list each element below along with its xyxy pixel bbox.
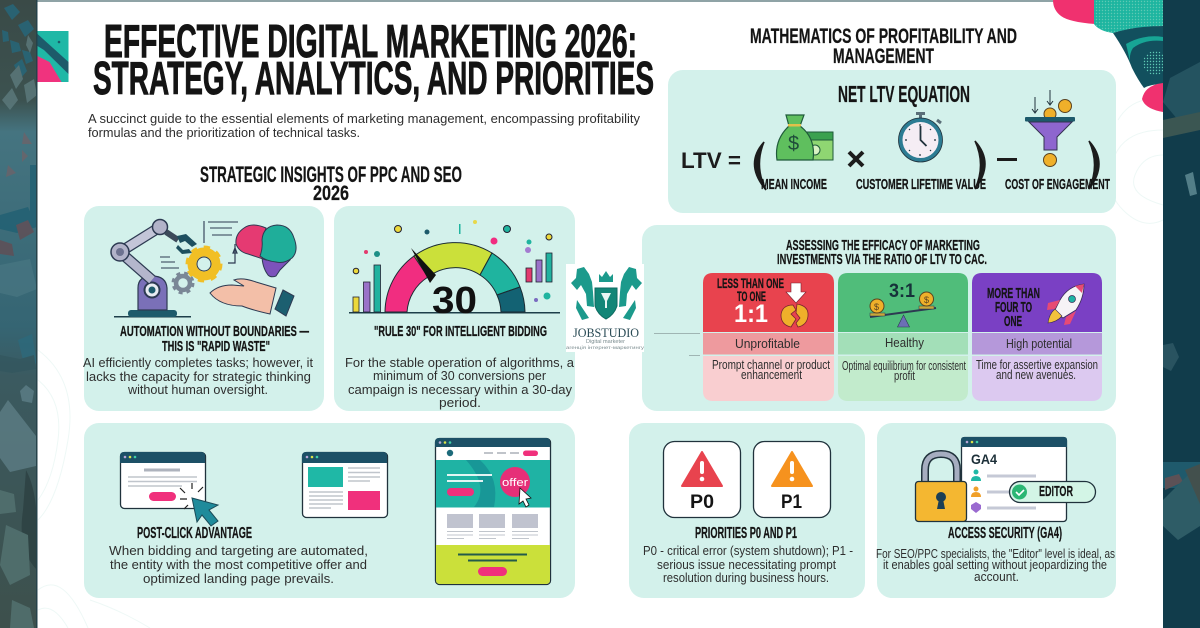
card text: [83, 356, 314, 397]
logo: JobStudio: JOBSTUDIO: [573, 326, 639, 340]
icon: P0 red warning: [664, 442, 740, 518]
card: unprofitable: 1:1: [734, 300, 768, 328]
card text: campaign is necessary within a 30-day: [348, 383, 573, 397]
subtitle: [88, 112, 641, 140]
card heading: THIS IS "RAPID WASTE": [162, 339, 270, 355]
panel: post-click advantage: [84, 423, 575, 598]
icon: stopwatch: [898, 112, 942, 162]
label: mean income: MEAN INCOME: [761, 177, 827, 193]
heading: mathematics of profitability: [750, 24, 1017, 68]
decoration: top right colour blobs: [1053, 0, 1167, 112]
panel: LTV to CAC ratio assessment: [642, 225, 1116, 411]
heading: strategic insights: [200, 162, 462, 205]
panel: net LTV equation: [668, 70, 1116, 213]
heading: mathematics of profitability: MANAGEMENT: [833, 44, 934, 68]
card: healthy: $: [924, 295, 929, 305]
panel heading: INVESTMENTS VIA THE RATIO OF LTV TO CAC.: [777, 251, 987, 268]
chart: gauge with bars and number 30: 30: [432, 280, 477, 322]
card: healthy: $: [874, 302, 879, 312]
card: unprofitable: LESS THAN ONE: [717, 275, 784, 291]
card text: When bidding and targeting are automated,: [109, 544, 368, 558]
card text: it enables goal setting without jeopardizing the: [883, 558, 1107, 572]
card: high potential: MORE THAN: [987, 286, 1040, 302]
icon: robot arm, gears, brain and hand: [111, 220, 296, 318]
icon: P0 red warning: P0: [690, 492, 714, 513]
equation: minus sign: [997, 158, 1017, 161]
card heading: ACCESS SECURITY (GA4): [948, 525, 1062, 542]
icon: GA4 window with lock and editor badge: EDITOR: [1039, 483, 1073, 500]
card: high potential: FOUR TO: [995, 300, 1032, 316]
panel heading: NET LTV EQUATION: [838, 81, 970, 107]
icon: P1 orange warning: [754, 442, 830, 518]
icon: funnel with coins: [1025, 90, 1075, 166]
title: EFFECTIVE DIGITAL MARKETING 2026:: [104, 15, 637, 67]
icon: P1 orange warning: P1: [781, 492, 802, 513]
card: high potential: Time for assertive expansion: [976, 358, 1098, 372]
title: [93, 15, 654, 104]
card: healthy: Optimal equilibrium for consistent: [842, 359, 966, 373]
panel: priorities P0 and P1: [629, 423, 865, 598]
card text: lacks the capacity for strategic thinking: [86, 370, 311, 384]
equation: open bracket: [754, 142, 766, 190]
decoration: left illustrated strip: [0, 0, 38, 628]
card text: without human oversight.: [127, 383, 268, 397]
card: unprofitable: Unprofitable: [735, 337, 800, 351]
equation: multiply sign: [849, 152, 863, 166]
decoration: small colour block: [38, 31, 68, 82]
card heading: [120, 324, 309, 355]
equation: final bracket: [1089, 141, 1099, 189]
panel: access security GA4: [876, 423, 1116, 598]
card: unprofitable: Prompt channel or product: [712, 358, 830, 372]
icon: ad window with cursor: [120, 452, 218, 526]
logo: JobStudio: Digital marketer: [586, 339, 625, 345]
card text: For the stable operation of algorithms, a: [345, 356, 574, 370]
card: high potential: [972, 273, 1102, 401]
card heading: "RULE 30" FOR INTELLIGENT BIDDING: [374, 324, 547, 340]
card text: [643, 544, 853, 585]
panel: rule 30: [334, 206, 575, 411]
card text: serious issue necessitating prompt: [657, 558, 836, 572]
title: STRATEGY, ANALYTICS, AND PRIORITIES: [93, 52, 654, 104]
panel: automation without boundaries: [83, 206, 324, 411]
chart: gauge with bars and number 30: [349, 220, 560, 322]
card: high potential: and new avenues.: [996, 368, 1076, 382]
card text: resolution during business hours.: [663, 571, 829, 585]
card heading: AUTOMATION WITHOUT BOUNDARIES —: [120, 324, 309, 340]
equation: LTV equals: LTV =: [681, 148, 741, 173]
card: healthy: 3:1: [889, 281, 915, 302]
decoration: faint contour lines: [38, 99, 1163, 628]
equation: close bracket: [975, 141, 985, 189]
card: unprofitable: [703, 273, 834, 401]
card text: period.: [439, 396, 481, 410]
logo: JobStudio: агенція інтернет-маркетингу: [566, 345, 645, 350]
card: unprofitable: enhancement: [741, 368, 802, 382]
icon: GA4 window with lock and editor badge: GA4: [971, 452, 997, 467]
subtitle: A succinct guide to the essential elements of marketing management, encompassing profitability: [88, 112, 641, 126]
icon: landing page with offer: [435, 438, 550, 584]
subtitle: formulas and the prioritization of technical tasks.: [88, 126, 360, 140]
card text: [109, 544, 368, 586]
card: healthy: [838, 273, 968, 401]
decoration: right illustrated strip: [1163, 0, 1200, 628]
card text: [345, 356, 574, 410]
card text: P0 - critical error (system shutdown); P1 -: [643, 544, 853, 558]
card text: minimum of 30 conversions per: [373, 369, 546, 383]
panel heading: ASSESSING THE EFFICACY OF MARKETING: [786, 237, 980, 254]
heading: strategic insights: STRATEGIC INSIGHTS OF PPC AND SEO: [200, 162, 462, 187]
card: high potential: ONE: [1004, 314, 1022, 330]
icon: content window: [302, 452, 388, 518]
card: high potential: High potential: [1006, 337, 1072, 351]
icon: money bag: $: [788, 133, 799, 155]
card heading: PRIORITIES P0 AND P1: [695, 525, 797, 542]
card: unprofitable: TO ONE: [737, 288, 766, 304]
icon: GA4 window with lock and editor badge: [916, 437, 1096, 522]
label: customer lifetime value: CUSTOMER LIFETIME VALUE: [856, 177, 986, 193]
card text: For SEO/PPC specialists, the "Editor" level is ideal, as: [876, 547, 1115, 561]
card: healthy: Healthy: [885, 336, 925, 350]
panel heading: [777, 237, 987, 268]
card text: [876, 547, 1115, 584]
card text: the entity with the most competitive offer and: [110, 558, 367, 572]
label: cost of engagement: COST OF ENGAGEMENT: [1005, 177, 1110, 193]
icon: money bag: [776, 115, 833, 160]
icon: landing page with offer: offer: [502, 477, 528, 489]
card: healthy: profit: [894, 369, 915, 383]
card text: optimized landing page prevails.: [143, 572, 334, 586]
heading: strategic insights: 2026: [313, 182, 349, 205]
card text: account.: [974, 570, 1019, 584]
card text: AI efficiently completes tasks; however, it: [83, 356, 314, 370]
card heading: POST-CLICK ADVANTAGE: [137, 525, 252, 542]
logo: JobStudio: [566, 264, 645, 352]
heading: mathematics of profitability: MATHEMATICS OF PROFITABILITY AND: [750, 24, 1017, 48]
